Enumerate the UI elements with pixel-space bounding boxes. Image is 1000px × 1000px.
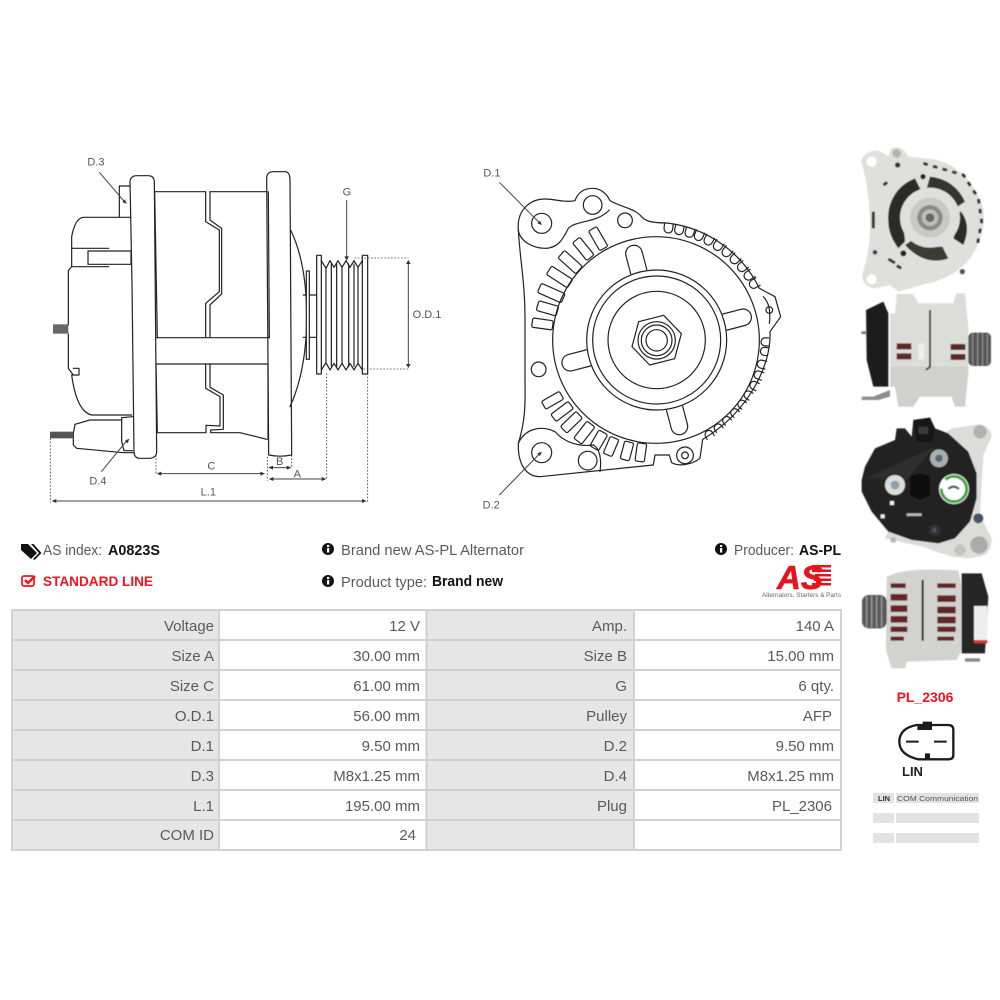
row: L.1 and plug: L.1 [193, 798, 214, 815]
spokes [560, 243, 753, 437]
pin legend: COM Communication [897, 794, 978, 803]
row: size A and B [171, 648, 834, 665]
row: size A and B: Size B [584, 648, 627, 665]
pin legend [873, 793, 979, 843]
row: O.D.1 and pulley: Pulley [586, 708, 627, 725]
rim scallops [664, 223, 769, 439]
photo: alternator pulley side [862, 570, 988, 668]
dimension labels [87, 157, 441, 499]
side view technical drawing [50, 157, 441, 503]
row: O.D.1 and pulley [175, 708, 832, 725]
hub nut [632, 315, 681, 365]
row: D.3 and D.4 [191, 768, 834, 785]
icon: info [322, 575, 334, 587]
upper cooling slots [532, 227, 608, 330]
row: L.1 and plug [193, 798, 832, 815]
pin legend: LIN [878, 794, 890, 803]
front view technical drawing [483, 168, 781, 511]
row: voltage and amperage [164, 618, 834, 635]
bolts [50, 324, 73, 438]
housing outline [518, 188, 781, 477]
line label: STANDARD LINE [43, 573, 153, 589]
dimension labels: A [294, 468, 302, 480]
lower cooling slots [541, 391, 647, 462]
plug name: PL_2306 [897, 689, 954, 705]
connector label: LIN [902, 764, 923, 779]
dimension labels: G [343, 186, 351, 198]
product type [322, 574, 504, 591]
row: size A and B: 15.00 mm [767, 648, 834, 665]
logo [762, 559, 842, 599]
icon: info [322, 543, 334, 555]
index line: A0823S [108, 543, 160, 559]
photo: alternator side with regulator [861, 293, 991, 407]
dimension labels: D.4 [89, 476, 106, 488]
row: D.3 and D.4: D.3 [191, 768, 214, 785]
alternator side outline [68, 172, 368, 458]
row: L.1 and plug: 195.00 mm [345, 798, 420, 815]
producer [715, 542, 841, 559]
row: COM ID [160, 827, 416, 844]
table grid [12, 609, 841, 851]
index line [21, 542, 160, 560]
row: voltage and amperage: Amp. [592, 618, 627, 635]
row: size C and G: 61.00 mm [353, 678, 420, 695]
row: COM ID: COM ID [160, 827, 214, 844]
row: size C and G: Size C [170, 678, 214, 695]
row: D.1 and D.2: D.2 [604, 738, 627, 755]
leader arrows [499, 182, 542, 495]
row: COM ID: 24 [399, 827, 416, 844]
index line: AS index: [43, 542, 102, 559]
row: L.1 and plug: Plug [597, 798, 627, 815]
icon: info [715, 543, 727, 555]
dimension labels: C [207, 461, 215, 473]
dimension labels: D.3 [87, 157, 104, 169]
row: D.3 and D.4: D.4 [604, 768, 627, 785]
icon: checked box [22, 576, 35, 586]
dimension labels: B [276, 456, 283, 468]
row: D.3 and D.4: M8x1.25 mm [747, 768, 834, 785]
leader labels: D.2 [483, 499, 500, 511]
table cell backgrounds [12, 610, 841, 850]
dimension labels: L.1 [201, 487, 216, 499]
row: size A and B: 30.00 mm [353, 648, 420, 665]
row: O.D.1 and pulley: AFP [803, 708, 832, 725]
row: voltage and amperage: 140 A [796, 618, 834, 635]
row: L.1 and plug: PL_2306 [772, 798, 832, 815]
row: D.1 and D.2 [191, 738, 834, 755]
row: size A and B: Size A [171, 648, 214, 665]
icon: connector [899, 722, 953, 759]
producer: Producer: [734, 542, 794, 559]
product type: Product type: [341, 574, 427, 591]
dimension lines [50, 172, 411, 503]
row: voltage and amperage: 12 V [389, 618, 420, 635]
logo: Alternators, Starters & Parts [762, 592, 842, 599]
row: voltage and amperage: Voltage [164, 618, 214, 635]
mounting lobes [518, 196, 773, 472]
logo: AS [776, 559, 823, 596]
photo: alternator front [861, 147, 984, 292]
row: O.D.1 and pulley: 56.00 mm [353, 708, 420, 725]
icon: tags [21, 544, 42, 560]
central disc and rings [553, 237, 759, 443]
product type: Brand new [432, 574, 504, 590]
photo: alternator rear [862, 418, 992, 558]
row: O.D.1 and pulley: O.D.1 [175, 708, 214, 725]
row: size C and G: 6 qty. [798, 678, 834, 695]
row: D.1 and D.2: D.1 [191, 738, 214, 755]
specifications table [12, 609, 841, 851]
row: D.1 and D.2: 9.50 mm [776, 738, 834, 755]
description: Brand new AS-PL Alternator [341, 542, 524, 559]
leader labels [483, 168, 500, 511]
row: size C and G: G [615, 678, 627, 695]
producer: AS-PL [799, 543, 841, 559]
row: D.3 and D.4: M8x1.25 mm [333, 768, 420, 785]
row: D.1 and D.2: 9.50 mm [362, 738, 420, 755]
dimension labels: O.D.1 [413, 309, 441, 321]
row: size C and G [170, 678, 834, 695]
leader labels: D.1 [483, 168, 500, 180]
